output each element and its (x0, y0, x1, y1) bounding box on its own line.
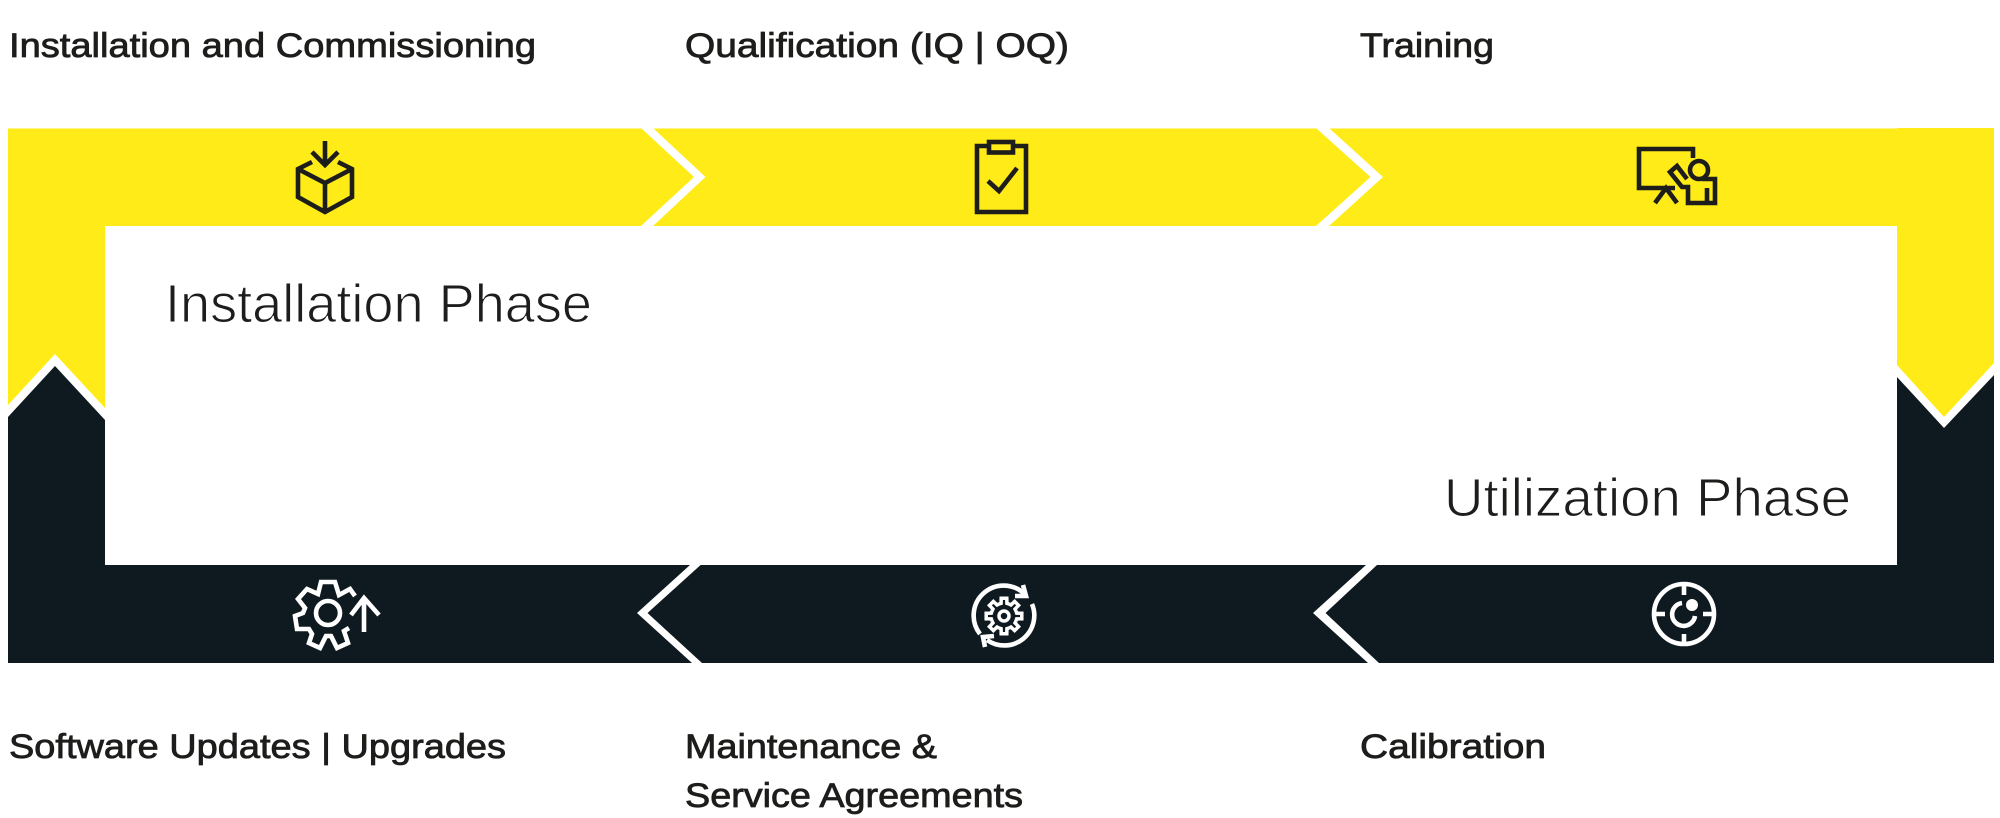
phase title: Installation Phase: Installation Phase (165, 274, 592, 334)
yellow arrow band (8, 128, 1994, 417)
icon: gear with circular arrows (974, 585, 1034, 647)
chevron separator 4 (1313, 565, 1379, 663)
panel: utilization phase dark band (8, 366, 1994, 663)
heading: Calibration: Calibration (1360, 728, 1546, 766)
chevron separator 1 (641, 128, 706, 226)
line 1: Maintenance & (685, 728, 937, 766)
chevron separator 2 (1316, 128, 1383, 226)
heading: Training: Training (1360, 27, 1494, 65)
phase title: Utilization Phase: Utilization Phase (1444, 468, 1851, 528)
heading: Maintenance and Service Agreements (685, 728, 1023, 815)
chevron separator 3 (637, 565, 702, 663)
heading: Software Updates | Upgrades: Software Updates | Upgrades (9, 728, 506, 766)
icon: trainer at board (1639, 149, 1715, 203)
dark arrow band (8, 366, 1994, 663)
icon: box with down arrow (298, 141, 352, 212)
panel: installation phase yellow band (8, 128, 1994, 417)
line 2: Service Agreements (685, 777, 1023, 815)
heading: Qualification: Qualification (IQ | OQ) (685, 27, 1069, 65)
icon: gear with up arrow (295, 582, 379, 648)
icon: clipboard with check (977, 142, 1026, 212)
icon: calibration target (1654, 584, 1714, 644)
heading: Installation and Commissioning: Installation and Commissioning (9, 27, 536, 65)
